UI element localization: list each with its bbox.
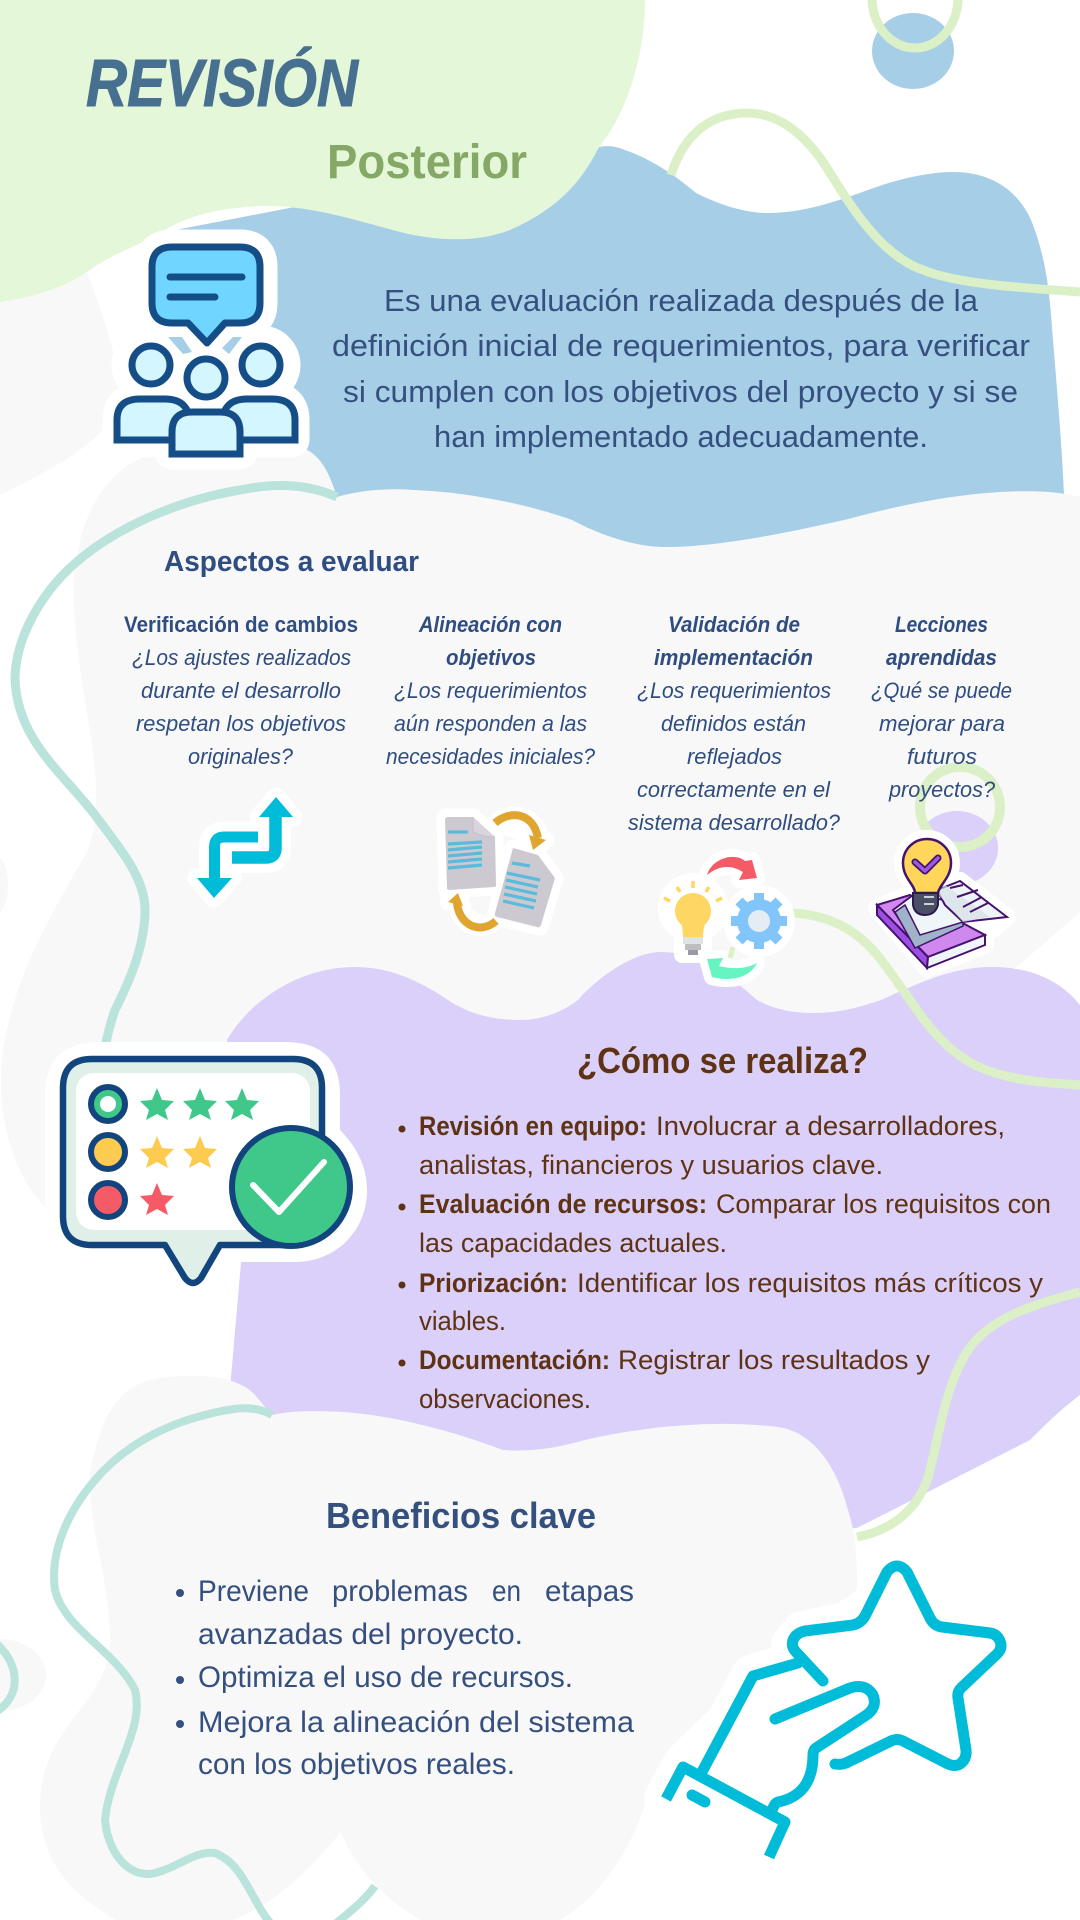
panel: grey benefits blob <box>40 1376 857 1920</box>
decoration: green ring behind text <box>920 767 1000 847</box>
list: process steps: Revisión en equipo: <box>419 1111 647 1141</box>
text: definition: Es una evaluación realizada después de la <box>384 283 979 318</box>
column: lecciones aprendidas <box>871 612 1012 802</box>
column: validación de implementación: definidos están <box>661 711 806 736</box>
icon: rating checklist <box>45 1042 367 1283</box>
column: verificación de cambios: originales? <box>188 744 294 769</box>
column: validación de implementación: reflejados <box>687 744 782 769</box>
list: process steps: observaciones. <box>419 1384 591 1414</box>
list: benefits: problemas <box>332 1575 468 1608</box>
decoration: teal wave upper <box>15 486 337 1075</box>
column: verificación de cambios: durante el desarrollo <box>141 678 341 703</box>
list: benefits: Mejora la alineación del sistema <box>198 1706 634 1739</box>
column: validación de implementación: sistema desarrollado? <box>628 810 841 835</box>
column: validación de implementación: implementación <box>654 645 813 670</box>
column: validación de implementación: Validación de <box>668 612 800 637</box>
panel: grey aspects blob <box>1 445 1080 1207</box>
list: process steps: analistas, financieros y usuarios clave. <box>419 1150 883 1180</box>
decoration: green wave middle <box>792 913 1080 1085</box>
panel: green title blob <box>0 0 645 302</box>
text: definition: si cumplen con los objetivos del proyecto y si se <box>343 374 1018 409</box>
column: alineación con objetivos <box>386 612 596 769</box>
panel: blue definition blob <box>165 146 1064 560</box>
decoration: lavender spot <box>916 811 998 885</box>
background: left grey blob <box>0 270 119 495</box>
column: verificación de cambios: ¿Los ajustes realizados <box>132 645 351 670</box>
text: definition: definición inicial de requerimientos, para verificar <box>332 328 1030 363</box>
subtitle: Posterior <box>327 136 527 189</box>
text: definition: han implementado adecuadamente. <box>434 419 928 454</box>
column: lecciones aprendidas: ¿Qué se puede <box>871 678 1012 703</box>
column: alineación con objetivos: Alineación con <box>418 612 562 637</box>
list: benefits: avanzadas del proyecto. <box>198 1618 523 1651</box>
list: process steps: Evaluación de recursos: <box>419 1189 707 1219</box>
panel: lilac process blob <box>227 952 1080 1560</box>
heading: cómo se realiza: ¿Cómo se realiza? <box>577 1040 868 1081</box>
decoration: teal wave tail <box>334 1886 375 1920</box>
list: benefits <box>176 1575 634 1781</box>
icon: team with speech bubble <box>117 247 295 454</box>
list: process steps: Registrar los resultados y <box>618 1345 931 1375</box>
list: process steps: viables. <box>419 1306 506 1336</box>
list: benefits: en <box>492 1575 521 1608</box>
decoration: small grey blob bottom left <box>0 1639 46 1711</box>
column: lecciones aprendidas: Lecciones <box>895 612 988 637</box>
list: benefits: Previene <box>198 1575 309 1608</box>
icon: swap arrows <box>197 797 293 898</box>
column: verificación de cambios: Verificación de cambios <box>124 612 358 637</box>
title: REVISIÓN <box>86 46 359 121</box>
list: process steps: Involucrar a desarrolladores, <box>656 1111 1005 1141</box>
column: lecciones aprendidas: proyectos? <box>888 777 996 802</box>
list: process steps: Identificar los requisitos más críticos y <box>577 1268 1044 1298</box>
list: benefits: con los objetivos reales. <box>198 1748 515 1781</box>
icon: documents exchange <box>445 815 555 927</box>
decoration: green wave top <box>671 113 1080 292</box>
column: alineación con objetivos: aún responden a las <box>394 711 587 736</box>
list: benefits: etapas <box>545 1575 634 1608</box>
column: verificación de cambios <box>124 612 358 769</box>
decoration: small teal ring <box>0 1643 15 1712</box>
column: alineación con objetivos: necesidades iniciales? <box>386 744 596 769</box>
icon: idea and gear cycle <box>664 857 787 979</box>
decoration: green ring top right <box>872 0 958 48</box>
list: process steps: Documentación: <box>419 1345 610 1375</box>
list: process steps: Comparar los requisitos con <box>716 1189 1051 1219</box>
decoration: small grey blob left <box>0 853 8 917</box>
list: process steps: Priorización: <box>419 1268 568 1298</box>
list: benefits: Optimiza el uso de recursos. <box>198 1661 573 1694</box>
column: validación de implementación: correctamente en el <box>637 777 831 802</box>
decoration: blue ellipse top right <box>872 13 954 89</box>
column: lecciones aprendidas: mejorar para <box>879 711 1005 736</box>
list: process steps: las capacidades actuales. <box>419 1228 727 1258</box>
decoration: teal wave lower <box>54 1408 272 1920</box>
decoration: green wave lower <box>857 1292 1080 1537</box>
column: validación de implementación <box>628 612 841 835</box>
column: validación de implementación: ¿Los requerimientos <box>637 678 831 703</box>
icon: book and light bulb <box>877 839 1007 968</box>
list: process steps <box>398 1111 1051 1414</box>
icon: hand holding star <box>666 1566 1001 1857</box>
column: lecciones aprendidas: aprendidas <box>886 645 997 670</box>
heading: aspectos a evaluar: Aspectos a evaluar <box>164 546 419 578</box>
text: definition <box>332 283 1030 454</box>
heading: beneficios clave: Beneficios clave <box>326 1495 596 1536</box>
column: verificación de cambios: respetan los objetivos <box>136 711 346 736</box>
column: alineación con objetivos: ¿Los requerimientos <box>394 678 587 703</box>
column: alineación con objetivos: objetivos <box>446 645 536 670</box>
column: lecciones aprendidas: futuros <box>907 744 977 769</box>
